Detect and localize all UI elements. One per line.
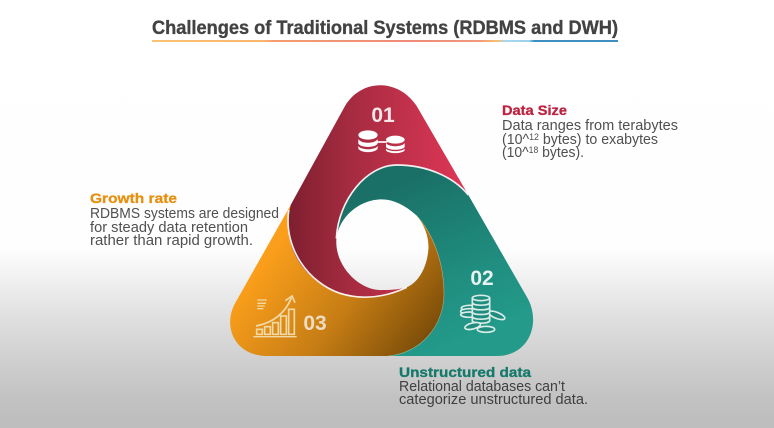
callout: growth rate: rather than rapid growth. [90, 233, 253, 249]
number 02: 02 [470, 267, 494, 290]
callout: growth rate: for steady data retention [90, 220, 248, 236]
callout: data size: 12 [529, 132, 539, 142]
callout: growth rate [90, 190, 279, 249]
callout: data size [502, 102, 678, 161]
callout: data size: (10^ [502, 132, 530, 148]
segment 01: red [288, 85, 468, 297]
title: Challenges of Traditional Systems (RDBMS and DWH) [152, 18, 618, 39]
number 01: 01 [371, 104, 395, 127]
callout: growth rate: Growth rate [90, 190, 177, 206]
callout: unstructured data: categorize unstructured data. [399, 392, 588, 408]
number 03: 03 [303, 312, 327, 335]
icon: growth chart [253, 296, 297, 337]
callout: data size: Data ranges from terabytes [502, 118, 678, 134]
highlight edges [288, 165, 468, 356]
callout: data size: bytes) to exabytes [539, 132, 658, 148]
callout: unstructured data: Relational databases can’t [399, 379, 565, 395]
callout: data size: (10^ [502, 145, 530, 161]
callout: unstructured data: Unstructured data [399, 364, 531, 380]
icon: databases [358, 130, 405, 153]
callout: data size: bytes). [538, 145, 584, 161]
triangular cycle diagram [230, 85, 533, 356]
callout: data size: 18 [529, 145, 538, 155]
callout: growth rate: RDBMS systems are designed [90, 206, 279, 222]
segment 02: teal [336, 165, 533, 356]
icon: coins [461, 295, 506, 332]
callout: data size: Data Size [502, 102, 567, 118]
callout: unstructured data [399, 364, 588, 408]
segment 03: orange [230, 205, 444, 356]
